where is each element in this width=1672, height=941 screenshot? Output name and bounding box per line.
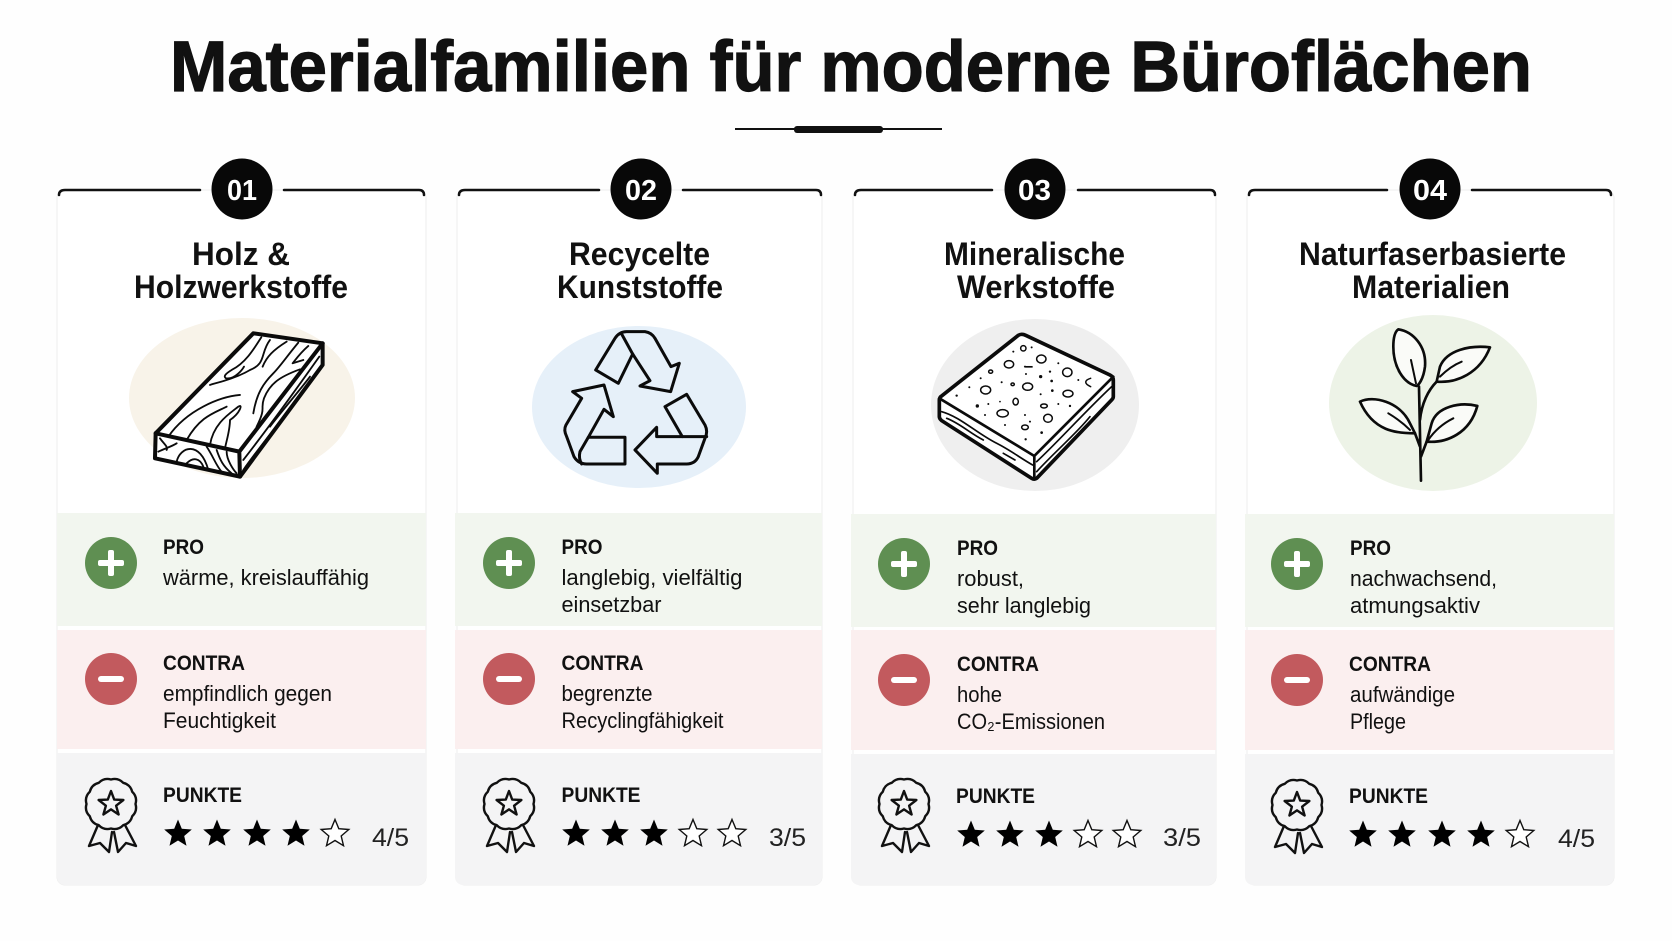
number badge 04 [1400,158,1460,220]
contra row: aufwändige [1350,682,1455,707]
heading: Materialien [1352,269,1510,305]
heading: Holzwerkstoffe [134,269,348,305]
pro row [57,513,426,626]
number badge 01 [212,158,272,220]
panel: card 01 Holz [57,158,426,885]
icon: plus [85,537,137,589]
heading: Naturfaserbasierte [1299,236,1566,272]
icon: plus [483,537,535,589]
icon: minus [878,654,930,706]
punkte row [57,753,426,885]
pro row: PRO [1350,537,1391,560]
panel: card 02 Kunststoffe [455,158,822,885]
icon: award badge [86,779,136,852]
icon: award badge [484,779,534,852]
icon: minus [1271,654,1323,706]
number badge 01: 01 [227,175,257,207]
number badge 03: 03 [1018,175,1051,207]
pro row: sehr langlebig [957,593,1091,618]
punkte row: PUNKTE [163,784,242,807]
punkte row [1245,754,1614,885]
punkte row: 4/5 [372,824,409,852]
punkte row: PUNKTE [956,785,1035,808]
pro row [851,514,1216,627]
icon: plus [1271,538,1323,590]
pro row [455,513,822,626]
pro row: nachwachsend, [1350,566,1497,591]
contra row: hohe [957,682,1002,707]
pro row: wärme, kreislauffähig [162,565,369,590]
heading: Werkstoffe [957,269,1115,305]
punkte row: 4/5 [1558,825,1595,853]
stars 4 of 5 [164,820,349,846]
icon: recycling arrows [532,326,746,488]
contra row: empfindlich gegen [163,681,332,706]
pro row: einsetzbar [562,592,662,617]
pro row: atmungsaktiv [1350,593,1480,618]
number badge 02 [610,158,672,220]
title: Materialfamilien für moderne Büroflächen [170,28,1532,107]
pro row: PRO [562,536,602,559]
punkte row: PUNKTE [1349,785,1428,808]
heading [944,236,1125,305]
heading: Recycelte [569,236,710,272]
contra row: CONTRA [562,652,644,675]
punkte row: 3/5 [1163,824,1201,852]
icon: minus [483,653,535,705]
punkte row [455,753,822,885]
contra row: CO₂-Emissionen [957,709,1105,734]
contra row: CONTRA [957,653,1039,676]
contra row: begrenzte [562,681,652,706]
number badge 03 [1004,158,1066,220]
contra row: Feuchtigkeit [163,708,276,733]
heading: Kunststoffe [557,269,723,305]
icon: plant [1329,315,1537,491]
punkte row: PUNKTE [562,784,640,807]
number badge 02: 02 [625,175,657,207]
punkte row [851,754,1216,885]
contra row: Pflege [1350,709,1406,734]
heading: Holz & [192,236,290,272]
heading: Mineralische [944,236,1125,272]
contra row: CONTRA [163,652,245,675]
icon: mineral slab [931,319,1139,491]
icon: plus [878,538,930,590]
heading [557,236,723,305]
heading [134,236,348,305]
stars 3 of 5 [562,820,746,846]
contra row: Recyclingfähigkeit [562,708,724,733]
pro row: PRO [957,537,998,560]
punkte row: 3/5 [769,824,806,852]
pro row: langlebig, vielfältig [562,565,742,590]
stars 3 of 5 [957,820,1141,847]
contra row [851,630,1216,750]
panel: card 04 Naturfaser [1245,158,1614,885]
contra row [455,630,822,749]
icon: minus [85,653,137,705]
icon: award badge [879,779,929,852]
pro row: robust, [957,566,1024,591]
title rule [735,126,942,133]
stars 4 of 5 [1349,820,1534,847]
number badge 04: 04 [1413,175,1447,207]
contra row [57,630,426,749]
heading [1299,236,1566,305]
pro row [1245,514,1614,627]
pro row: PRO [163,536,204,559]
icon: wood plank [129,318,355,478]
contra row: CONTRA [1349,653,1431,676]
panel: card 03 Mineralische [851,158,1216,885]
contra row [1245,630,1614,750]
icon: award badge [1272,780,1322,853]
